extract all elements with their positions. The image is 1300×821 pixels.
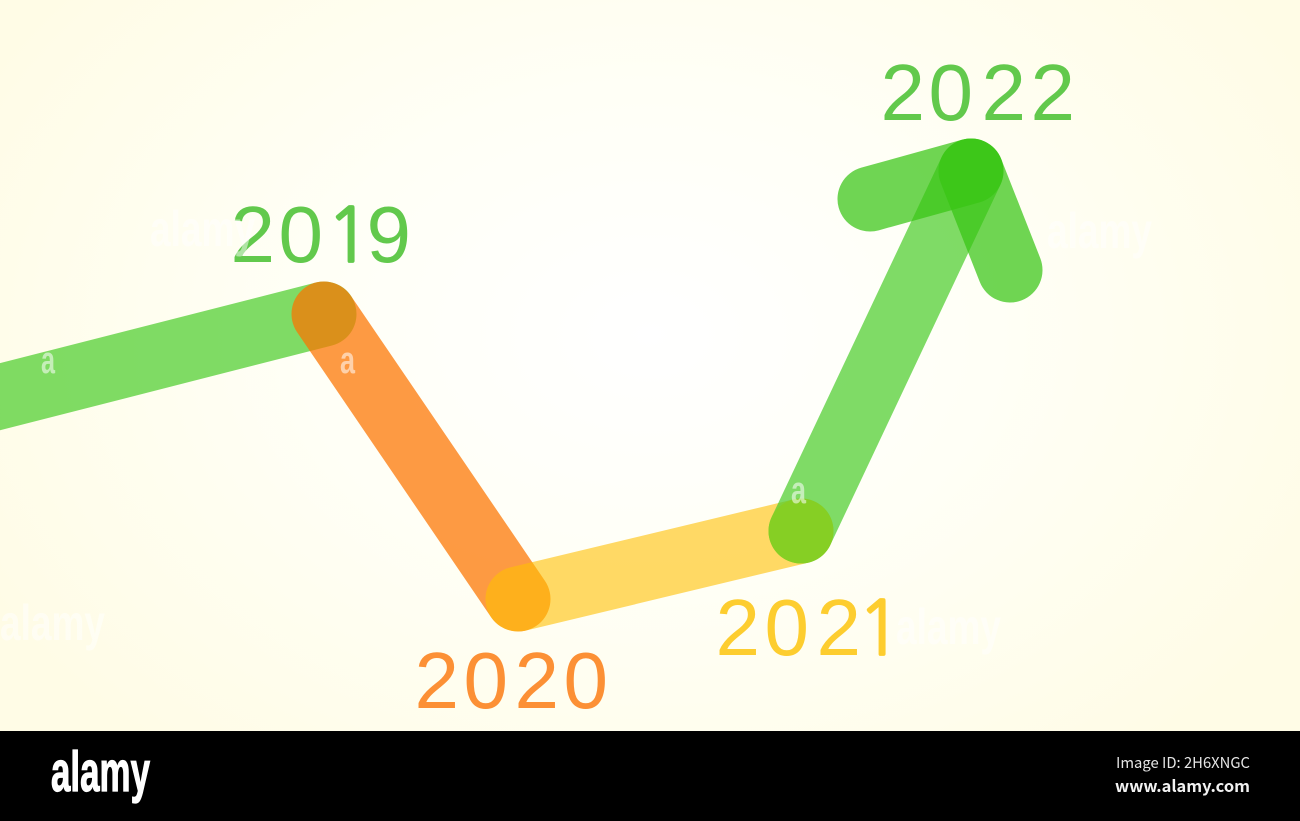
year labels xyxy=(230,48,1075,725)
label: 2019: 20 xyxy=(230,190,323,279)
label: 2019: 9 xyxy=(366,190,411,279)
footer bar xyxy=(0,731,1300,821)
joint: 2021 overlap xyxy=(768,498,834,564)
segment: 2019 green xyxy=(0,314,324,412)
small watermark letters on line xyxy=(41,340,807,512)
arrowhead: left arm xyxy=(870,171,971,199)
trend line xyxy=(0,171,1010,599)
alamy logo: alamy xyxy=(51,740,150,804)
segment: 2021 yellow xyxy=(518,531,801,599)
small watermark letters on line: a xyxy=(791,470,807,512)
faint watermarks xyxy=(0,201,1152,655)
label: 2020: 2020 xyxy=(414,636,608,725)
label: 2019: 1 xyxy=(326,198,371,273)
segment: 2020 orange xyxy=(324,314,518,599)
segment: 2022 green shaft xyxy=(801,171,971,531)
faint watermarks: alamy xyxy=(150,201,255,257)
label: 2021: 1 xyxy=(857,591,902,666)
faint watermarks: alamy xyxy=(0,595,105,651)
website: www.alamy.com xyxy=(1115,773,1250,797)
small watermark letters on line: a xyxy=(41,340,56,382)
faint watermarks: alamy xyxy=(1047,203,1152,259)
label: 2021: 202 xyxy=(716,583,861,672)
image id: Image ID: 2H6XNGC xyxy=(1116,752,1250,773)
faint watermarks: alamy xyxy=(896,599,1001,655)
arrowhead: right arm xyxy=(971,171,1010,270)
small watermark letters on line: a xyxy=(340,340,356,382)
label: 2022: 2022 xyxy=(880,48,1075,137)
